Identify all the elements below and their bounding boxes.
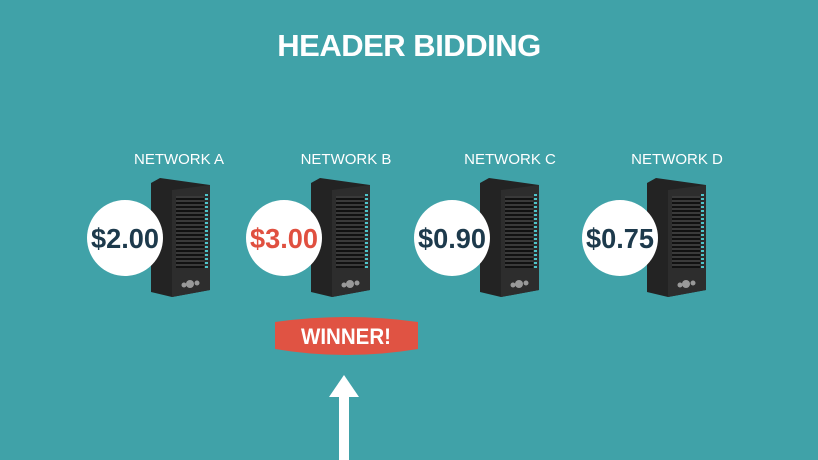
server B: [311, 178, 370, 297]
arrow: [329, 375, 359, 460]
bid A: [87, 200, 163, 276]
winner banner: [275, 317, 418, 355]
server A: [151, 178, 210, 297]
label: network A: NETWORK A: [134, 151, 224, 168]
winner banner: WINNER!: [301, 324, 391, 349]
bid D: $0.75: [586, 223, 654, 254]
bid D: [582, 200, 658, 276]
label: network C: NETWORK C: [464, 151, 556, 168]
server C: [480, 178, 539, 297]
bid B: [246, 200, 322, 276]
label: network B: NETWORK B: [301, 151, 391, 168]
server D: [647, 178, 706, 297]
title: HEADER BIDDING: [277, 28, 541, 63]
bid C: [414, 200, 490, 276]
bid A: $2.00: [91, 223, 159, 254]
label: network D: NETWORK D: [631, 151, 723, 168]
bid C: $0.90: [418, 223, 486, 254]
bid B: $3.00: [250, 223, 318, 254]
